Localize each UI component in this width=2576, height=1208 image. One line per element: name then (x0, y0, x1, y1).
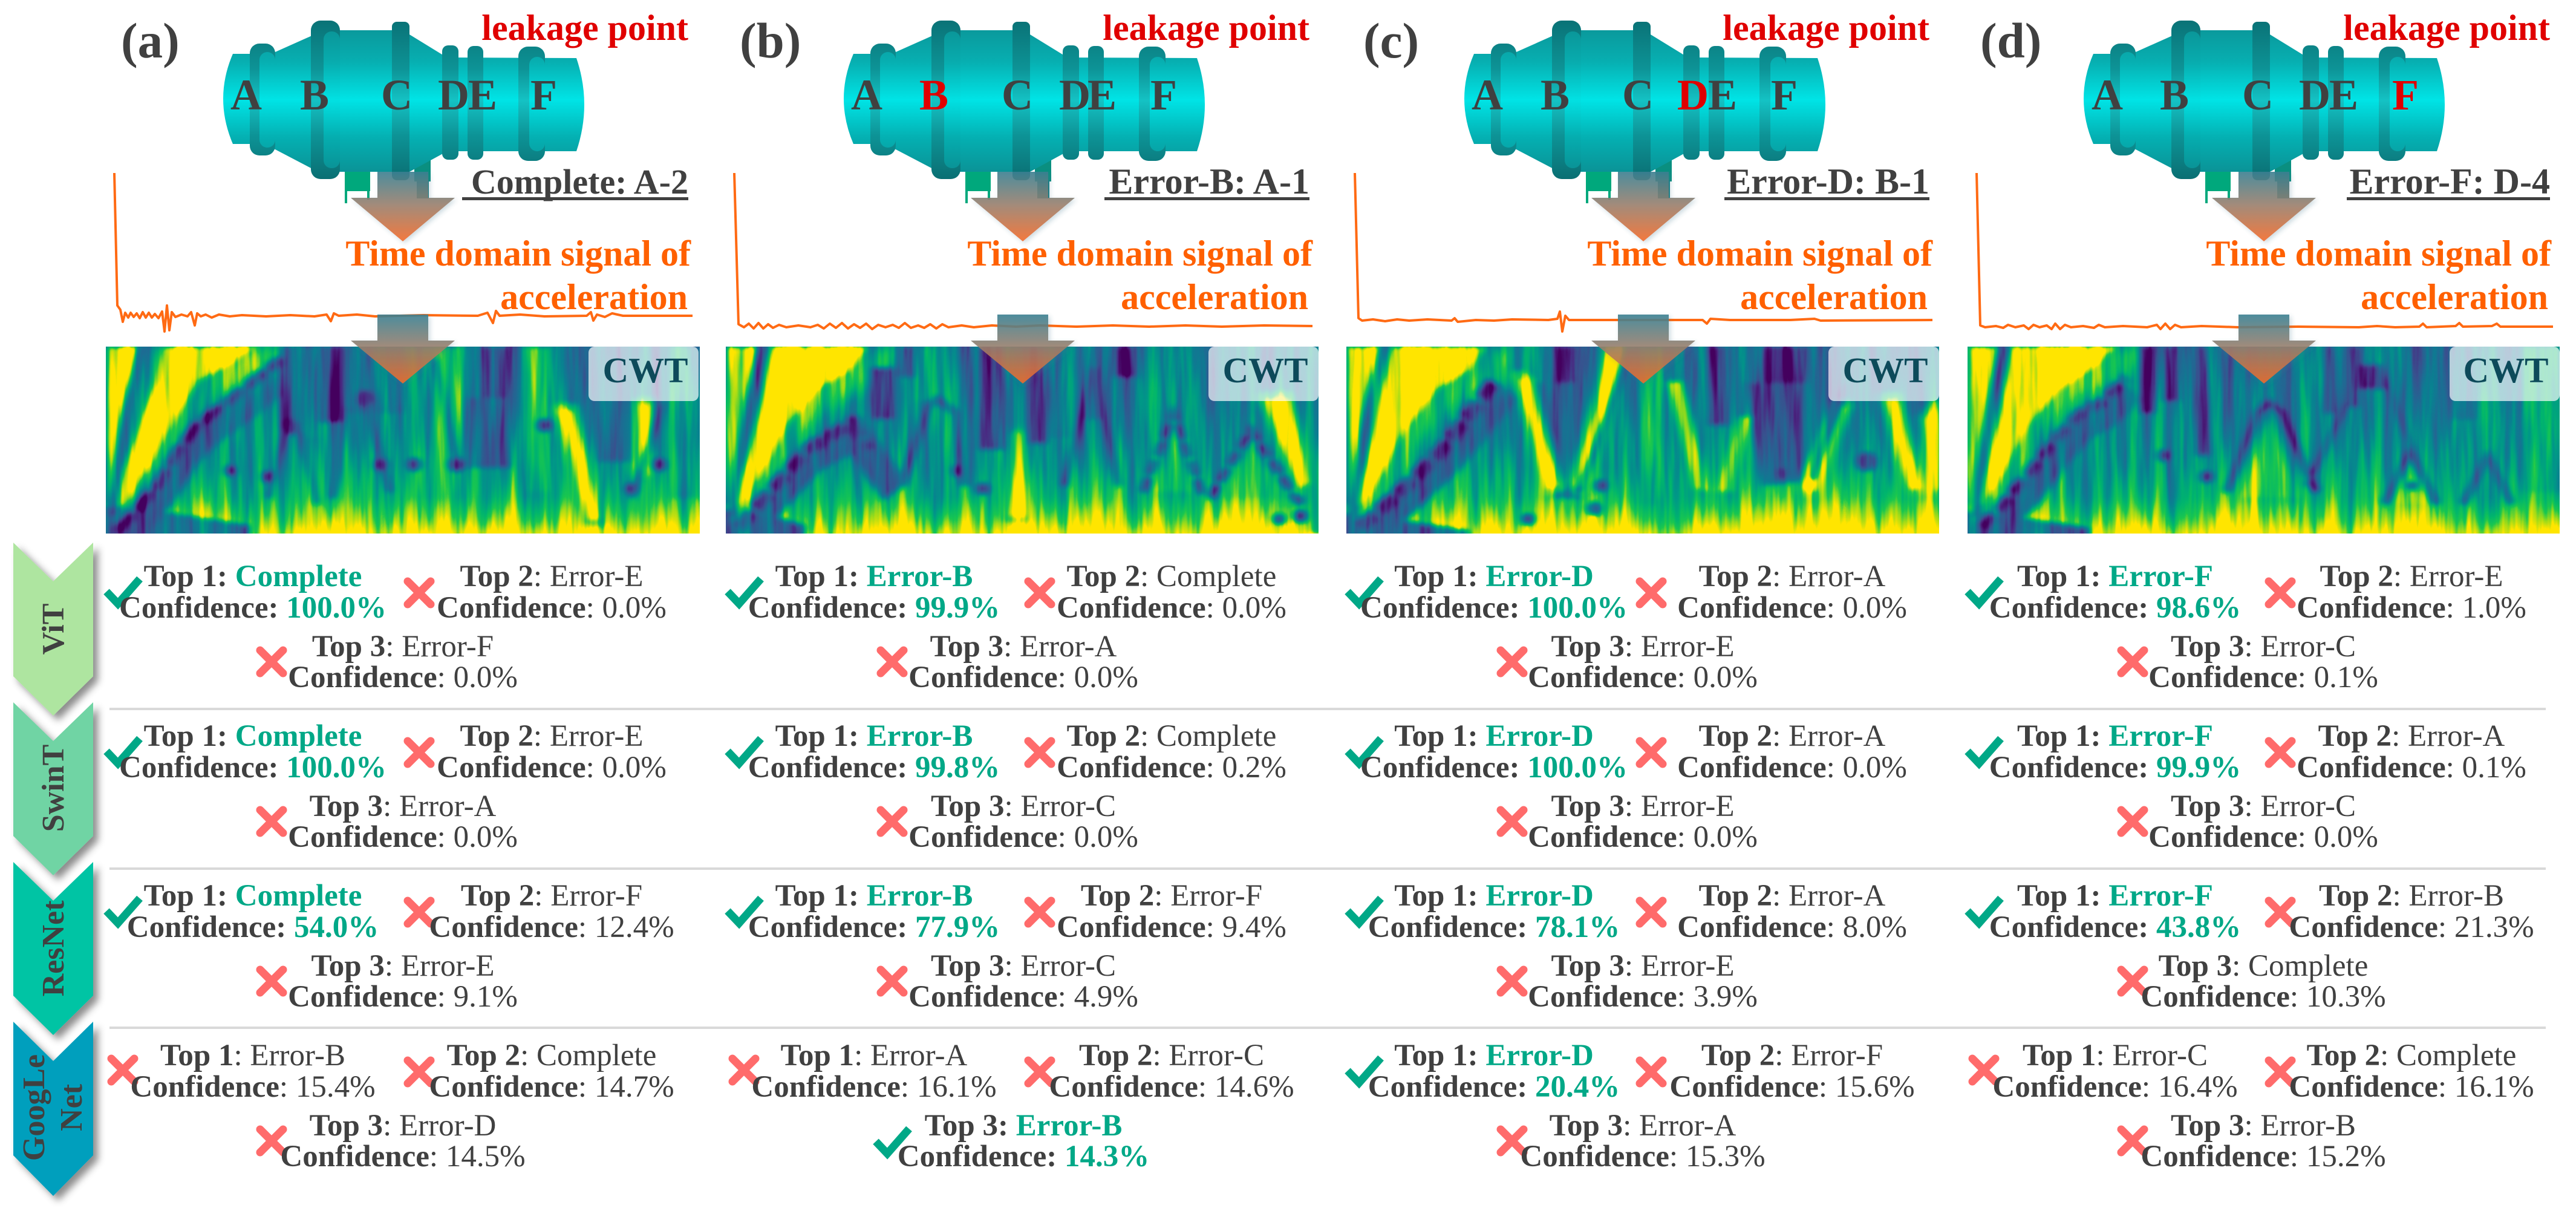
model label: ResNet (13, 862, 93, 1035)
arrow: signal to CWT (351, 315, 455, 384)
spool flange letters (a) (230, 71, 557, 119)
label: (a): (a) (121, 13, 180, 68)
cell: GoogLeNet (b): Top 2: Error-C (1079, 1039, 1264, 1073)
condition label with underline: Error-F: D-4 (2349, 162, 2550, 201)
condition label with underline: Error-D: B-1 (1727, 162, 1929, 201)
cell: GoogLeNet (b) (732, 1039, 1294, 1174)
cell: SwinT (d): Top 1: Error-F (2017, 719, 2213, 753)
spool flange letters (b): F (1150, 71, 1177, 119)
panel (d) header (1977, 8, 2560, 401)
cell: ViT (a): Confidence: 0.0% (288, 661, 518, 694)
cell: GoogLeNet (a): Top 3: Error-D (310, 1109, 496, 1143)
cell: ViT (c): Top 1: Error-D (1394, 560, 1594, 593)
spool flange letters (b): A (851, 71, 882, 119)
cell: ViT (c): Confidence: 0.0% (1528, 661, 1758, 694)
CWT tag: CWT (2464, 350, 2548, 390)
cell: ResNet (c) (1348, 879, 1907, 1014)
cell: GoogLeNet (d): Top 2: Complete (2307, 1039, 2516, 1073)
cell: GoogLeNet (b): Confidence: 16.1% (751, 1070, 997, 1104)
cell: GoogLeNet (b): Top 1: Error-A (781, 1039, 968, 1073)
cell: SwinT (c) (1348, 719, 1907, 854)
cell: ViT (c): Confidence: 100.0% (1360, 591, 1628, 625)
spool flange letters (c): A (1472, 71, 1503, 119)
cell: GoogLeNet (a): Confidence: 14.7% (429, 1070, 674, 1104)
spool flange letters (c): D (1677, 71, 1709, 119)
cell: GoogLeNet (d): Top 1: Error-C (2023, 1039, 2208, 1073)
cell: ResNet (d) (1968, 879, 2534, 1014)
signal caption (345, 233, 691, 317)
cell: SwinT (d) (1968, 719, 2526, 854)
cell: GoogLeNet (a) (111, 1039, 674, 1174)
cell: ViT (a): Top 1: Complete (144, 560, 362, 593)
cell: GoogLeNet (c) (1348, 1039, 1915, 1174)
label: leakage point: leakage point (2343, 8, 2550, 48)
CWT tag (2450, 347, 2560, 401)
cell: SwinT (c): Top 2: Error-A (1699, 719, 1886, 753)
cell: SwinT (a): Top 1: Complete (144, 719, 362, 753)
cell: ResNet (a): Top 2: Error-F (461, 879, 642, 913)
spool flange letters (a): F (530, 71, 557, 119)
arrow: spool to signal (971, 172, 1075, 241)
CWT tag: CWT (603, 350, 688, 390)
cell: SwinT (a): Top 3: Error-A (310, 789, 497, 823)
cell: ResNet (c): Top 1: Error-D (1394, 879, 1594, 913)
cell: ResNet (c): Top 3: Error-E (1551, 949, 1735, 983)
spool flange letters (c) (1472, 71, 1798, 119)
cell: ViT (b): Top 1: Error-B (775, 560, 973, 593)
cell: GoogLeNet (c): Top 1: Error-D (1394, 1039, 1594, 1073)
cell: ViT (c) (1348, 560, 1907, 694)
label: (c): (c) (1363, 13, 1419, 68)
signal caption: Time domain signal of (345, 233, 691, 273)
spool flange letters (d): A (2092, 71, 2123, 119)
spool flange letters (b): D (1059, 71, 1091, 119)
icon: spool with flanges (a) (223, 21, 584, 203)
condition label with underline: Error-B: A-1 (1109, 162, 1309, 201)
results: SwinT row (106, 719, 2526, 854)
panel: CWT scalogram (a) (106, 347, 700, 534)
cell: ViT (d): Top 3: Error-C (2171, 630, 2356, 664)
spool flange letters (a): A (230, 71, 262, 119)
cell: ViT (d): Confidence: 98.6% (1989, 591, 2241, 625)
signal caption (1587, 233, 1933, 317)
model label: GoogLeNet (13, 1022, 93, 1196)
model label: SwinT (13, 702, 93, 875)
cell: ViT (b): Confidence: 0.0% (1057, 591, 1286, 625)
spool flange letters (d): B (2160, 71, 2189, 119)
cell: GoogLeNet (c): Top 3: Error-A (1550, 1109, 1736, 1143)
cell: SwinT (d): Confidence: 0.1% (2297, 751, 2526, 785)
row dividers (109, 708, 2546, 1029)
signal caption: acceleration (1121, 277, 1308, 317)
cell: ResNet (a): Top 3: Error-E (311, 949, 495, 983)
cell: ResNet (b): Confidence: 77.9% (748, 910, 1000, 944)
cell: ResNet (a): Confidence: 9.1% (288, 980, 518, 1014)
cell: SwinT (b): Top 3: Error-C (931, 789, 1116, 823)
cell: GoogLeNet (a): Top 2: Complete (447, 1039, 656, 1073)
cell: ResNet (c): Top 2: Error-A (1699, 879, 1886, 913)
label: (d): (d) (1980, 13, 2041, 68)
cell: GoogLeNet (b): Confidence: 14.3% (898, 1140, 1149, 1174)
cell: ResNet (b): Top 3: Error-C (931, 949, 1116, 983)
cell: SwinT (c): Confidence: 0.0% (1677, 751, 1907, 785)
cell: ResNet (a) (106, 879, 674, 1014)
cell: ResNet (b): Confidence: 9.4% (1057, 910, 1286, 944)
cell: ResNet (a): Confidence: 12.4% (429, 910, 674, 944)
model label: ResNet: ResNet (36, 900, 71, 996)
cell: GoogLeNet (d) (1972, 1039, 2534, 1174)
model label: GoogLeNet: Net (54, 1083, 89, 1131)
cell: SwinT (a): Confidence: 0.0% (288, 820, 518, 854)
cell: ViT (d) (1968, 560, 2526, 694)
cell: SwinT (b): Confidence: 99.8% (748, 751, 1000, 785)
arrow: spool to signal (1591, 172, 1695, 241)
spool flange letters (a): B (300, 71, 329, 119)
results: ViT row (106, 560, 2526, 694)
cell: ViT (b): Top 2: Complete (1067, 560, 1276, 593)
cell: SwinT (a): Confidence: 0.0% (437, 751, 667, 785)
spool flange letters (b): E (1087, 71, 1117, 119)
spool flange letters (c): C (1622, 71, 1654, 119)
arrow: signal to CWT (971, 315, 1075, 384)
cell: ResNet (c): Confidence: 3.9% (1528, 980, 1758, 1014)
panel (b) header (734, 8, 1319, 401)
CWT tag (1828, 347, 1939, 401)
panel: CWT scalogram (b) (726, 347, 1319, 534)
cell: ResNet (c): Confidence: 78.1% (1368, 910, 1620, 944)
arrow: signal to CWT (1591, 315, 1695, 384)
cell: ViT (a): Confidence: 0.0% (437, 591, 667, 625)
cell: SwinT (a): Top 2: Error-E (460, 719, 644, 753)
icon: spool with flanges (c) (1464, 21, 1825, 203)
spool flange letters (d): F (2392, 71, 2419, 119)
cell: ResNet (d): Confidence: 21.3% (2289, 910, 2534, 944)
cell: GoogLeNet (c): Confidence: 15.3% (1520, 1140, 1766, 1174)
cell: SwinT (c): Confidence: 100.0% (1360, 751, 1628, 785)
cell: GoogLeNet (a): Confidence: 15.4% (130, 1070, 376, 1104)
chart: acceleration signal (a) (114, 173, 693, 331)
cell: ViT (d): Top 1: Error-F (2017, 560, 2213, 593)
cell: ResNet (a): Top 1: Complete (144, 879, 362, 913)
CWT tag: CWT (1223, 350, 1308, 390)
panel (a) header (114, 8, 699, 401)
cell: ResNet (d): Confidence: 43.8% (1989, 910, 2241, 944)
cell: ViT (c): Top 3: Error-E (1551, 630, 1735, 664)
cell: SwinT (b): Confidence: 0.2% (1057, 751, 1286, 785)
cell: GoogLeNet (d): Confidence: 16.1% (2289, 1070, 2534, 1104)
spool flange letters (d): C (2242, 71, 2274, 119)
arrow: spool to signal (2212, 172, 2316, 241)
panel (c) header (1355, 8, 1939, 401)
signal caption: Time domain signal of (1587, 233, 1933, 273)
CWT tag (589, 347, 699, 401)
cell: SwinT (c): Top 3: Error-E (1551, 789, 1735, 823)
signal caption: acceleration (1740, 277, 1928, 317)
cell: GoogLeNet (c): Confidence: 20.4% (1368, 1070, 1620, 1104)
panel: CWT scalogram (d) (1968, 347, 2560, 534)
spool flange letters (c): F (1771, 71, 1798, 119)
icon: spool with flanges (d) (2084, 21, 2445, 203)
results: GoogLeNet row (111, 1039, 2534, 1174)
cell: ViT (a): Top 2: Error-E (460, 560, 644, 593)
panel: CWT scalogram (c) (1346, 347, 1939, 534)
cell: ResNet (b): Confidence: 4.9% (908, 980, 1138, 1014)
model label: ViT (13, 543, 93, 716)
arrow: spool to signal (351, 172, 455, 241)
cell: ViT (c): Top 2: Error-A (1699, 560, 1886, 593)
cell: ViT (c): Confidence: 0.0% (1677, 591, 1907, 625)
cell: SwinT (a) (106, 719, 667, 854)
cell: ResNet (b): Top 2: Error-F (1081, 879, 1262, 913)
spool flange letters (b): C (1002, 71, 1033, 119)
model label: GoogLeNet: GoogLe (17, 1054, 51, 1161)
cell: ViT (a): Confidence: 100.0% (119, 591, 386, 625)
cell: GoogLeNet (d): Top 3: Error-B (2171, 1109, 2356, 1143)
cell: GoogLeNet (c): Confidence: 15.6% (1669, 1070, 1915, 1104)
chart: acceleration signal (d) (1977, 173, 2553, 329)
arrow: signal to CWT (2212, 315, 2316, 384)
cell: GoogLeNet (b): Top 3: Error-B (925, 1109, 1122, 1143)
cell: ViT (d): Top 2: Error-E (2320, 560, 2503, 593)
cell: SwinT (d): Top 2: Error-A (2318, 719, 2505, 753)
cell: ViT (b): Top 3: Error-A (930, 630, 1117, 664)
cell: GoogLeNet (c): Top 2: Error-F (1701, 1039, 1883, 1073)
cell: SwinT (b): Top 2: Complete (1067, 719, 1276, 753)
cell: GoogLeNet (a): Confidence: 14.5% (280, 1140, 526, 1174)
chart: acceleration signal (c) (1355, 173, 1932, 331)
spool flange letters (a): C (381, 71, 412, 119)
spool flange letters (b) (851, 71, 1177, 119)
spool flange letters (d): E (2329, 71, 2358, 119)
spool flange letters (a): D (438, 71, 469, 119)
spool flange letters (d): D (2299, 71, 2330, 119)
cell: ResNet (d): Top 1: Error-F (2017, 879, 2213, 913)
chart: acceleration signal (b) (734, 173, 1312, 329)
cell: GoogLeNet (d): Confidence: 15.2% (2141, 1140, 2386, 1174)
icon: spool with flanges (b) (844, 21, 1205, 203)
label: leakage point: leakage point (1103, 8, 1309, 48)
signal caption: acceleration (500, 277, 688, 317)
cell: SwinT (d): Confidence: 99.9% (1989, 751, 2241, 785)
cell: ViT (d): Confidence: 0.1% (2148, 661, 2378, 694)
cell: SwinT (a): Confidence: 100.0% (119, 751, 386, 785)
cell: ResNet (d): Confidence: 10.3% (2141, 980, 2386, 1014)
cell: ResNet (d): Top 2: Error-B (2319, 879, 2504, 913)
cell: SwinT (b): Top 1: Error-B (775, 719, 973, 753)
signal caption: Time domain signal of (2206, 233, 2552, 273)
label: leakage point: leakage point (481, 8, 688, 48)
cell: GoogLeNet (d): Confidence: 16.4% (1992, 1070, 2238, 1104)
cell: SwinT (b) (728, 719, 1286, 854)
signal caption (2206, 233, 2552, 317)
condition label with underline: Complete: A-2 (471, 162, 688, 201)
cell: ResNet (d): Top 3: Complete (2159, 949, 2368, 983)
CWT tag (1208, 347, 1319, 401)
cell: ViT (a): Top 3: Error-F (312, 630, 494, 664)
cell: ResNet (a): Confidence: 54.0% (127, 910, 379, 944)
model label: SwinT: SwinT (36, 745, 71, 832)
cell: ResNet (b) (728, 879, 1286, 1014)
cell: ViT (b): Confidence: 99.9% (748, 591, 1000, 625)
spool flange letters (d) (2092, 71, 2419, 119)
cell: GoogLeNet (a): Top 1: Error-B (160, 1039, 345, 1073)
cell: ViT (a) (106, 560, 667, 694)
spool flange letters (b): B (919, 71, 948, 119)
signal caption: Time domain signal of (967, 233, 1313, 273)
spool flange letters (c): E (1708, 71, 1737, 119)
signal caption: acceleration (2361, 277, 2548, 317)
cell: GoogLeNet (b): Confidence: 14.6% (1049, 1070, 1294, 1104)
cell: ResNet (c): Confidence: 8.0% (1677, 910, 1907, 944)
cell: SwinT (c): Top 1: Error-D (1394, 719, 1594, 753)
cell: SwinT (b): Confidence: 0.0% (908, 820, 1138, 854)
label: leakage point: leakage point (1723, 8, 1929, 48)
cell: ViT (d): Confidence: 1.0% (2297, 591, 2526, 625)
cell: SwinT (d): Confidence: 0.0% (2148, 820, 2378, 854)
signal caption (967, 233, 1313, 317)
cell: SwinT (d): Top 3: Error-C (2171, 789, 2356, 823)
model label: ViT: ViT (36, 604, 71, 655)
cell: SwinT (c): Confidence: 0.0% (1528, 820, 1758, 854)
cell: ResNet (b): Top 1: Error-B (775, 879, 973, 913)
cell: ViT (b): Confidence: 0.0% (908, 661, 1138, 694)
results: ResNet row (106, 879, 2534, 1014)
spool flange letters (c): B (1541, 71, 1570, 119)
label: (b): (b) (740, 13, 801, 68)
CWT tag: CWT (1843, 350, 1928, 390)
spool flange letters (a): E (468, 71, 497, 119)
cell: ViT (b) (728, 560, 1286, 694)
